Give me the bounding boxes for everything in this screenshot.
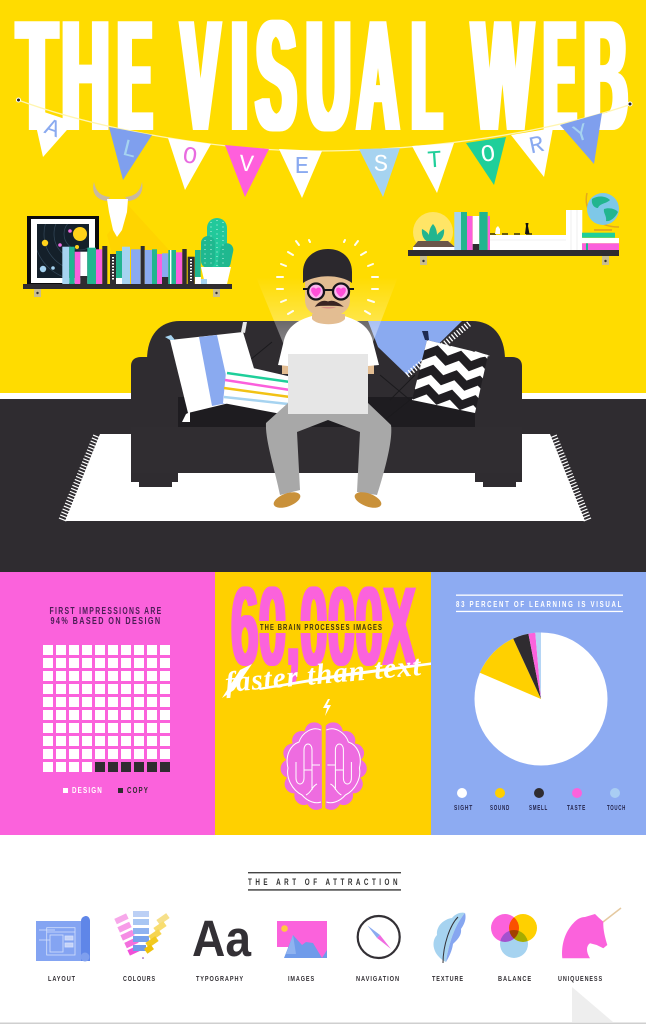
script: faster than text: faster than text [224, 650, 423, 699]
pie legend: TASTE [567, 803, 586, 812]
rug [62, 434, 588, 521]
icon: brain [281, 722, 367, 810]
pillow: blue striped [165, 322, 262, 422]
pie legend: SOUND [490, 803, 510, 812]
feature labels: TYPOGRAPHY [196, 974, 244, 983]
legs [266, 403, 391, 495]
feature labels: NAVIGATION [356, 974, 400, 983]
feature labels: IMAGES [288, 974, 315, 983]
baseboard [0, 393, 646, 400]
icon: navigation compass [358, 916, 400, 958]
section: the art of attraction [0, 835, 646, 1024]
icon: globe [586, 193, 619, 231]
bunting: a love story: R [527, 132, 547, 161]
icon: typography: Aa [192, 910, 252, 967]
icon: images [277, 921, 327, 958]
heading: THE ART OF ATTRACTION [248, 877, 401, 887]
glasses with hearts [303, 284, 354, 300]
bunting: a love story: A [40, 115, 64, 145]
pie legend [454, 788, 626, 812]
bunting: a love story: V [238, 152, 255, 180]
legend: COPY [127, 785, 149, 795]
left shelf [23, 284, 232, 297]
pie legend: TOUCH [607, 803, 626, 812]
legend: DESIGN [72, 785, 103, 795]
face [305, 273, 350, 317]
bunting: a love story: S [374, 152, 388, 179]
pillow: black and white chevron [412, 331, 490, 413]
pie legend: SMELL [529, 803, 548, 812]
pillow: rainbow stripes [223, 362, 292, 416]
icon: colour swatches [114, 911, 170, 959]
feature labels: LAYOUT [48, 974, 76, 983]
pie chart [474, 632, 608, 766]
bunting: a love story: O [479, 141, 497, 170]
bunting: a love story [16, 98, 632, 198]
wall shadow behind skull [107, 205, 200, 284]
laptop light beam [256, 277, 398, 355]
heading: FIRST IMPRESSIONS ARE [50, 605, 162, 617]
shirt [278, 316, 379, 410]
panel: first impressions [0, 572, 215, 835]
title [17, 0, 627, 164]
icon: bull skull [93, 182, 142, 237]
bunting: a love story: E [295, 154, 309, 181]
feature labels: UNIQUENESS [558, 974, 603, 983]
sofa [131, 321, 522, 487]
shoes [272, 489, 383, 511]
floor [0, 399, 646, 572]
framed solar system poster [27, 216, 99, 284]
heading [50, 605, 162, 627]
right shelf [408, 250, 619, 265]
pie legend: SIGHT [454, 803, 473, 812]
neck [312, 314, 345, 324]
feature labels: BALANCE [498, 974, 532, 983]
feature labels: TEXTURE [432, 974, 464, 983]
wall background [0, 0, 646, 394]
waffle chart 94 percent [43, 645, 170, 772]
terrarium [413, 212, 455, 252]
icon: unicorn [562, 908, 621, 958]
icon: layout blueprint [36, 916, 90, 962]
sub heading band: THE BRAIN PROCESSES IMAGES [260, 622, 383, 632]
feature labels [48, 974, 603, 983]
moustache [316, 301, 342, 306]
bunting: a love story: L [119, 136, 140, 166]
arms skin [282, 362, 374, 374]
icon: balance circles [491, 914, 537, 958]
laptop [288, 354, 368, 414]
icon: feather [434, 913, 466, 963]
left shelf books [62, 246, 201, 284]
hat [303, 249, 352, 283]
cactus in pot [201, 218, 235, 284]
icon: lightning bolt [323, 699, 331, 716]
sub heading band [258, 621, 385, 633]
legend [63, 785, 149, 795]
panel: 60,000x faster: 60,000X [231, 564, 416, 689]
bunting: a love story: O [181, 143, 199, 172]
glow rays around head [277, 240, 378, 314]
panel: 60,000x faster [215, 564, 460, 835]
bunting: a love story: Y [570, 120, 592, 150]
feature labels: COLOURS [123, 974, 156, 983]
person with laptop [266, 249, 391, 511]
heading: 94% BASED ON DESIGN [50, 615, 162, 627]
bunting: a love story: T [426, 148, 443, 175]
panel: learning is visual [431, 572, 646, 835]
right shelf books and chess [454, 210, 619, 250]
